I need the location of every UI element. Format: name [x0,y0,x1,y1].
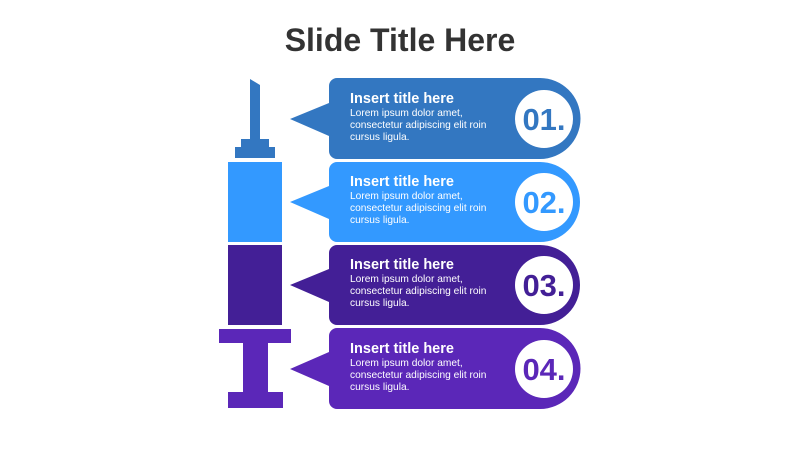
text: item 3: consectetur adipiscing elit roin [350,286,486,297]
text: item 3 [350,257,486,309]
callout 1 [290,78,580,159]
text: item 2: consectetur adipiscing elit roin [350,203,486,214]
text: item 1: consectetur adipiscing elit roin [350,120,486,131]
text: item 2: Insert title here [350,174,454,190]
text: item 4 [350,341,486,393]
callout 1: 01. [522,102,566,137]
text: item 2: Lorem ipsum dolor amet, [350,191,463,202]
callout 2 [290,162,580,242]
text: item 2: cursus ligula. [350,215,409,226]
icon: syringe [219,79,291,408]
text: item 1: Insert title here [350,91,454,107]
text: item 1: Lorem ipsum dolor amet, [350,108,463,119]
text: item 2 [350,174,486,226]
text: item 4: consectetur adipiscing elit roin [350,370,486,381]
callout 3: 03. [522,268,566,303]
text: item 1 [350,91,486,143]
text: item 4: Insert title here [350,341,454,357]
callout 3 [290,245,580,325]
title: Slide Title Here [285,22,515,58]
callout 4: 04. [522,352,566,387]
text: item 4: cursus ligula. [350,382,409,393]
text: item 3: Insert title here [350,257,454,273]
text: item 4: Lorem ipsum dolor amet, [350,358,463,369]
text: item 3: cursus ligula. [350,298,409,309]
callout 2: 02. [522,185,566,220]
callout 4 [290,328,580,409]
text: item 3: Lorem ipsum dolor amet, [350,274,463,285]
text: item 1: cursus ligula. [350,132,409,143]
